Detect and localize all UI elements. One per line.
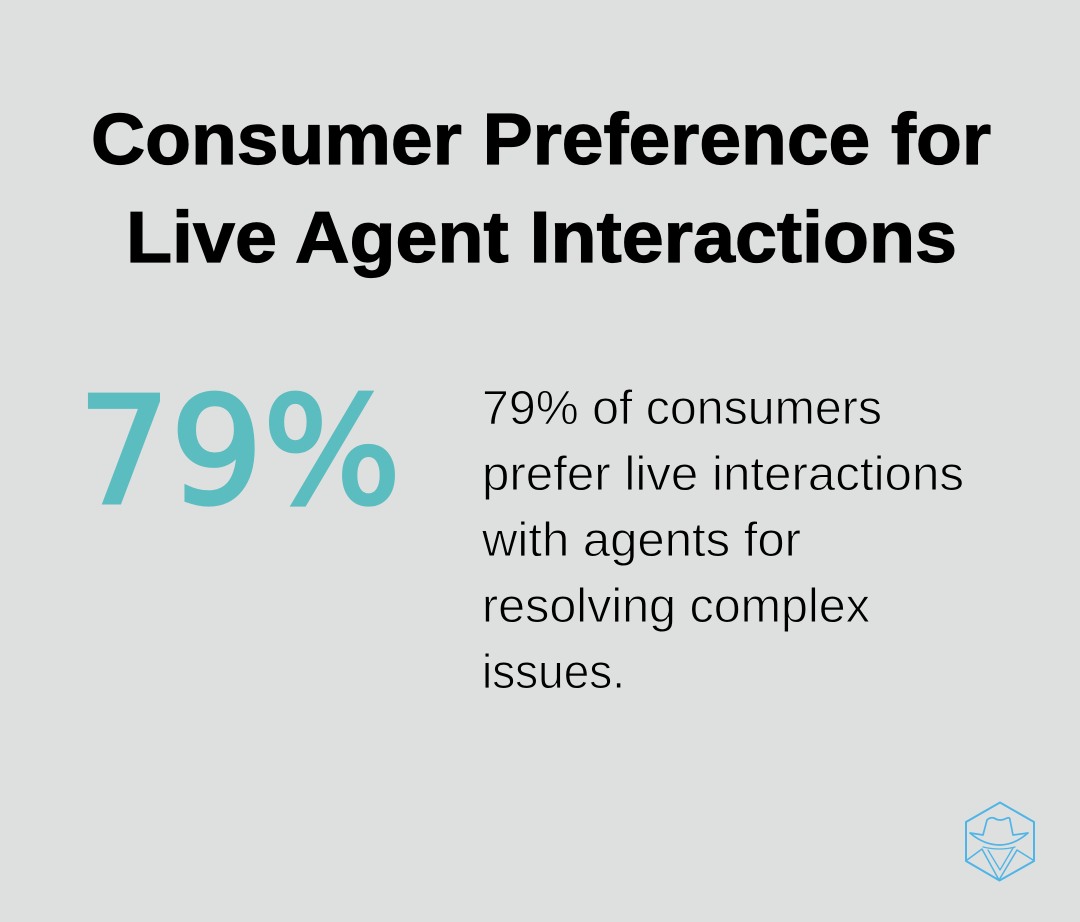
- description text: [481, 382, 964, 699]
- description text: resolving complex: [482, 580, 870, 633]
- title: Live Agent Interactions: [126, 198, 957, 278]
- big statistic: 79%: 79%: [78, 366, 401, 538]
- icon: hexagon logo with spy hat: [966, 802, 1034, 880]
- title: [91, 100, 991, 278]
- description text: 79% of consumers: [482, 382, 882, 435]
- description text: issues.: [482, 646, 625, 699]
- description text: with agents for: [481, 514, 801, 567]
- description text: prefer live interactions: [482, 448, 964, 501]
- title: Consumer Preference for: [91, 100, 991, 180]
